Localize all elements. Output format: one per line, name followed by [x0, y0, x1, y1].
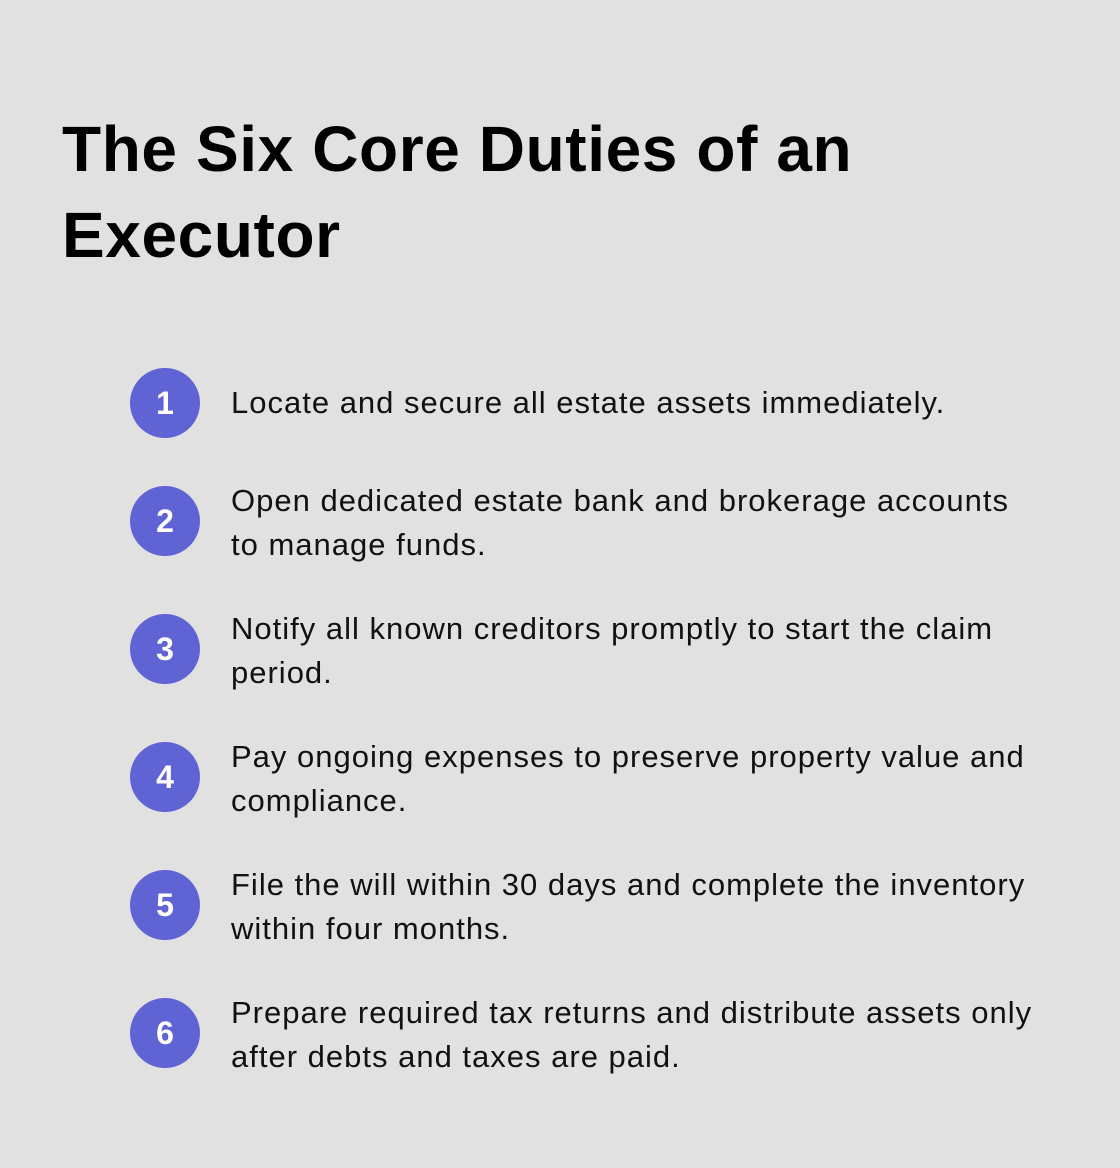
- title: Executor: [62, 199, 341, 271]
- badge 3: 3: [156, 631, 174, 667]
- text 3: [231, 611, 993, 690]
- item 5: [130, 867, 1025, 946]
- text 2: to manage funds.: [231, 527, 487, 562]
- text 3: Notify all known creditors promptly to start the claim: [231, 611, 993, 646]
- text 1: Locate and secure all estate assets immediately.: [231, 385, 945, 420]
- text 6: after debts and taxes are paid.: [231, 1039, 681, 1074]
- badge 4: 4: [156, 759, 174, 795]
- item 2: [130, 483, 1009, 562]
- badge 5: [130, 870, 200, 940]
- text 4: [231, 739, 1025, 818]
- badge 6: [130, 998, 200, 1068]
- badge 3: [130, 614, 200, 684]
- text 2: Open dedicated estate bank and brokerage accounts: [231, 483, 1009, 518]
- badge 1: 1: [156, 385, 174, 421]
- text 6: Prepare required tax returns and distribute assets only: [231, 995, 1032, 1030]
- title: [62, 113, 852, 271]
- item 3: [130, 611, 993, 690]
- badge 1: [130, 368, 200, 438]
- text 6: [231, 995, 1032, 1074]
- item 6: [130, 995, 1032, 1074]
- item 1: [130, 368, 945, 438]
- text 5: File the will within 30 days and complete the inventory: [231, 867, 1025, 902]
- text 5: within four months.: [231, 911, 510, 946]
- badge 2: [130, 486, 200, 556]
- badge 5: 5: [156, 887, 174, 923]
- text 4: Pay ongoing expenses to preserve property value and: [231, 739, 1025, 774]
- badge 4: [130, 742, 200, 812]
- text 2: [231, 483, 1009, 562]
- badge 2: 2: [156, 503, 174, 539]
- title: The Six Core Duties of an: [62, 113, 852, 185]
- item 4: [130, 739, 1025, 818]
- text 3: period.: [231, 655, 333, 690]
- badge 6: 6: [156, 1015, 174, 1051]
- text 4: compliance.: [231, 783, 407, 818]
- text 5: [231, 867, 1025, 946]
